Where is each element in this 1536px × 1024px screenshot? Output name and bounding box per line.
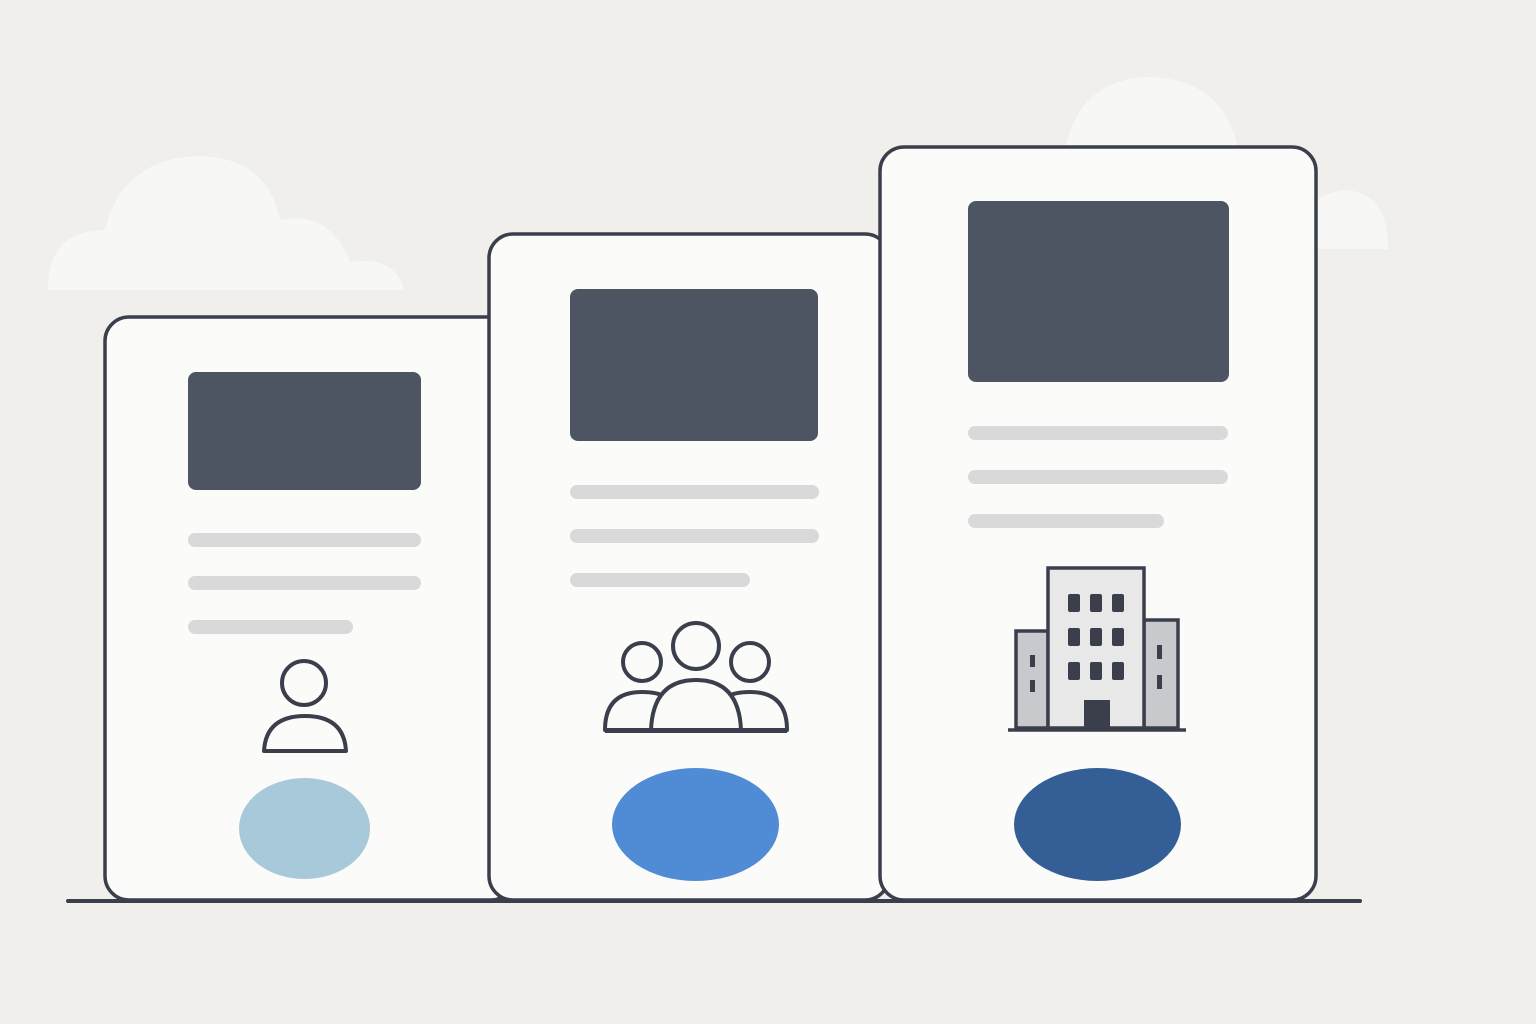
cloud: right <box>1063 77 1388 249</box>
card 3 text lines <box>968 426 1228 528</box>
panel: card 1 <box>105 317 515 900</box>
card 3 button <box>1014 768 1181 881</box>
card 1 text lines <box>188 533 421 634</box>
card 3 header block <box>968 201 1229 382</box>
panel: card 2 <box>489 234 889 900</box>
card 1 header block <box>188 372 421 490</box>
card 2 text lines <box>570 485 819 587</box>
ground line <box>68 899 1360 903</box>
panel: card 3 <box>880 147 1316 900</box>
icon: building <box>1008 568 1186 730</box>
card 2 header block <box>570 289 818 441</box>
card 1 button <box>239 778 370 879</box>
icon: person <box>264 661 346 751</box>
card 2 button <box>612 768 779 881</box>
cloud: left <box>48 156 404 290</box>
icon: group <box>605 623 787 731</box>
